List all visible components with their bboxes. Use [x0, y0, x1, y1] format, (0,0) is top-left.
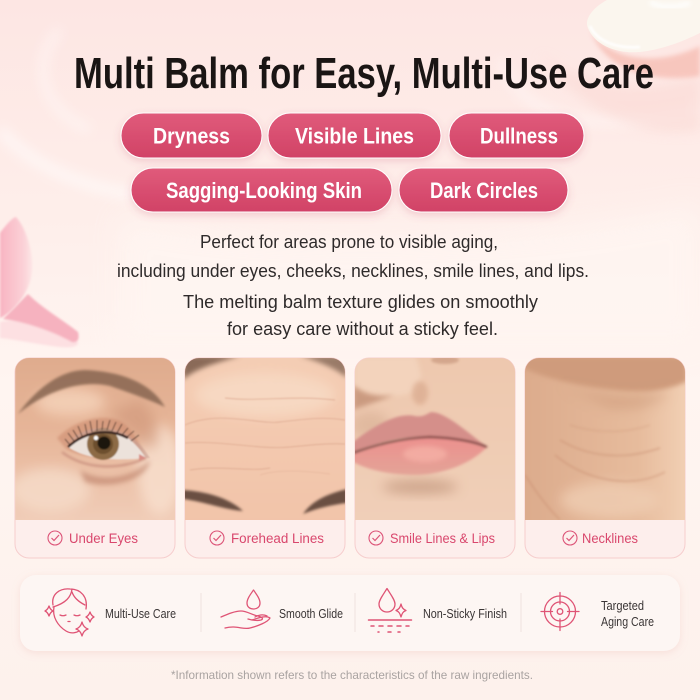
icon: drop on skin — [368, 588, 412, 632]
pill: Dark Circles: Dark Circles — [430, 178, 538, 203]
label: Non-Sticky Finish: Non-Sticky Finish — [423, 606, 507, 621]
pill: Dullness: Dullness — [480, 124, 558, 148]
photo: eye — [10, 356, 182, 522]
decoration: pink petals — [0, 217, 79, 347]
pill: Dark Circles — [399, 168, 568, 212]
photo: lips — [350, 356, 517, 522]
label: Targeted Aging Care: Aging Care — [601, 614, 654, 629]
footnote: *Information shown refers to the characteristics of the raw ingredients. — [171, 668, 533, 682]
pill: Dryness — [121, 113, 262, 158]
card: Smile Lines & Lips — [350, 356, 517, 558]
description text — [117, 232, 589, 339]
card: Forehead Lines — [183, 356, 347, 558]
photo: forehead — [183, 356, 347, 522]
pill: Dullness — [449, 113, 584, 158]
description text: for easy care without a sticky feel. — [227, 319, 498, 339]
label: Targeted Aging Care: Targeted — [601, 598, 644, 613]
label: Forehead Lines: Forehead Lines — [231, 531, 324, 546]
description text: including under eyes, cheeks, necklines, smile lines, and lips. — [117, 261, 589, 281]
label: Smooth Glide: Smooth Glide — [279, 606, 343, 621]
label: Smile Lines & Lips: Smile Lines & Lips — [390, 531, 495, 546]
pill: Sagging-Looking Skin — [131, 168, 392, 212]
pill: Sagging-Looking Skin: Sagging-Looking Skin — [166, 178, 362, 203]
icon: face with sparkles — [45, 589, 94, 636]
label: Under Eyes: Under Eyes — [69, 531, 138, 546]
card: Necklines — [523, 356, 687, 558]
card: Under Eyes — [10, 356, 182, 558]
description text: The melting balm texture glides on smoothly — [183, 292, 538, 312]
pill: Visible Lines: Visible Lines — [295, 124, 414, 148]
panel: benefits — [20, 575, 680, 651]
icon: target — [541, 592, 579, 630]
decoration: balm spoon — [587, 0, 700, 78]
pill: Dryness: Dryness — [153, 124, 230, 148]
description text: Perfect for areas prone to visible aging, — [200, 232, 498, 252]
pill: Visible Lines — [268, 113, 441, 158]
pills: concerns — [121, 113, 584, 212]
icon: hand with drop — [221, 590, 270, 628]
label: Necklines: Necklines — [582, 531, 638, 546]
label: Targeted Aging Care — [601, 598, 654, 629]
photo: neck — [523, 356, 687, 522]
label: Multi-Use Care: Multi-Use Care — [105, 606, 176, 621]
